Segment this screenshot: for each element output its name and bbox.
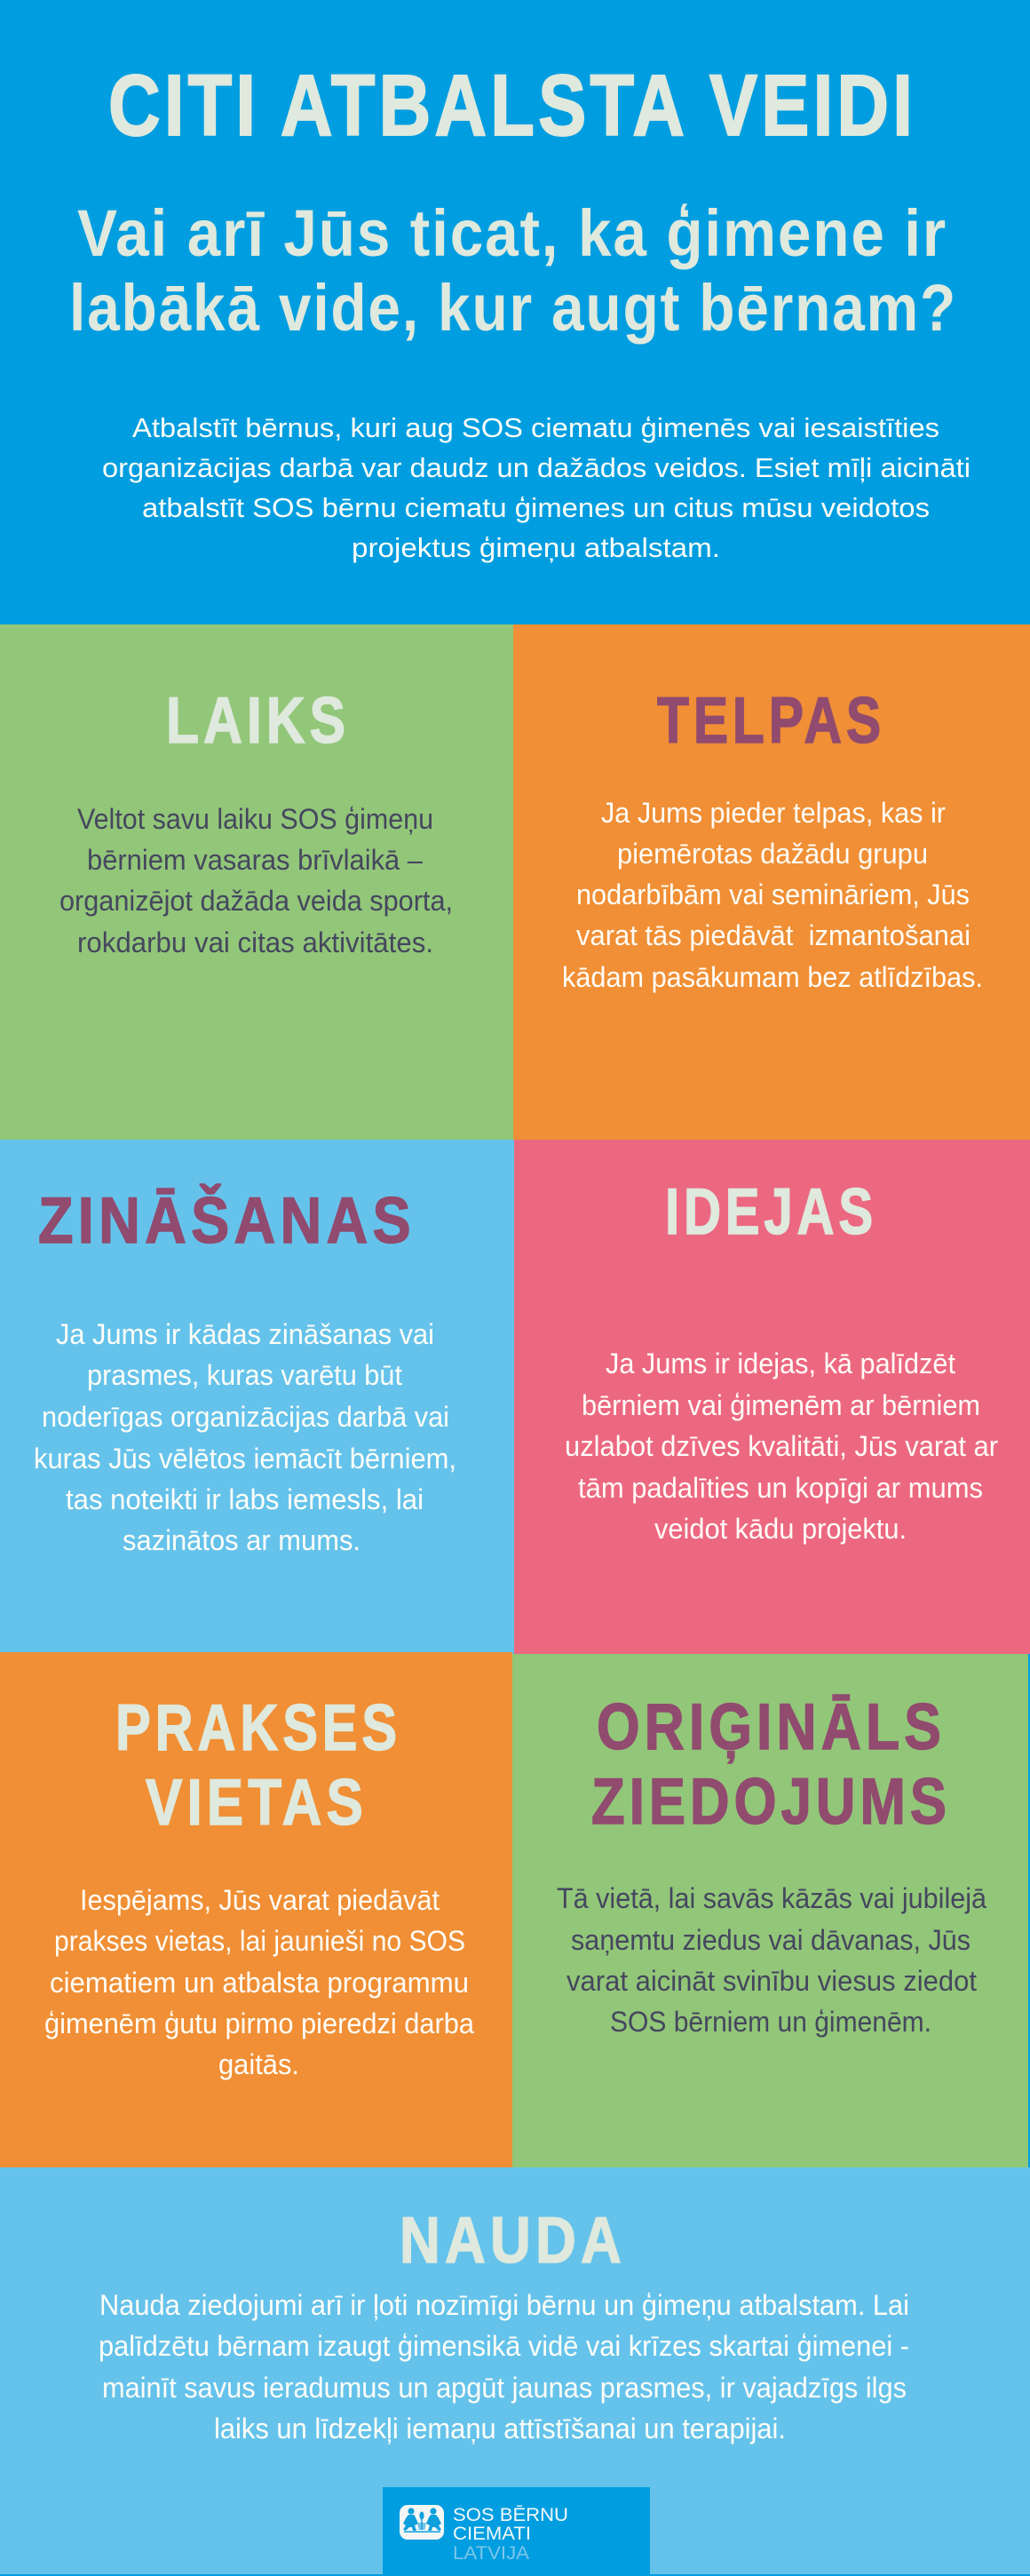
text: laiks: [59, 803, 453, 958]
text: zināšanas: sazinātos ar mums.: [123, 1524, 360, 1556]
text: zināšanas: [34, 1318, 456, 1556]
intro text: projektus ģimeņu atbalstam.: [352, 532, 720, 563]
text: prakses vietas: Iespējams, Jūs varat piedāvāt: [80, 1884, 440, 1916]
text: telpas: kādam pasākumam bez atlīdzības.: [562, 961, 983, 993]
heading: oriģināls ziedojums: ZIEDOJUMS: [591, 1766, 951, 1838]
subtitle: [69, 196, 957, 345]
panel: laiks: [0, 624, 514, 1140]
text: idejas: [565, 1348, 998, 1545]
heading: oriģināls ziedojums: [591, 1691, 951, 1838]
text: laiks: bērniem vasaras brīvlaikā –: [87, 844, 423, 876]
text: telpas: piemērotas dažādu grupu: [617, 838, 928, 870]
text: prakses vietas: ciematiem un atbalsta programmu: [50, 1967, 469, 1999]
panel: prakses vietas: [0, 1652, 512, 2167]
text: telpas: [562, 797, 983, 993]
logo text: SOS BĒRNU: [453, 2505, 568, 2525]
text: oriģināls ziedojums: saņemtu ziedus vai dāvanas, Jūs: [571, 1924, 971, 1956]
text: telpas: nodarbībām vai semināriem, Jūs: [576, 879, 970, 910]
text: nauda: palīdzētu bērnam izaugt ģimensikā vidē vai krīzes skartai ģimenei -: [99, 2330, 909, 2362]
text: nauda: [99, 2289, 909, 2445]
intro text: organizācijas darbā var daudz un dažādos veidos. Esiet mīļi aicināti: [102, 452, 971, 483]
panel: idejas: [514, 1140, 1030, 1654]
panel: zināšanas: [0, 1140, 514, 1653]
text: oriģināls ziedojums: varat aicināt svinību viesus ziedot: [566, 1965, 977, 1997]
text: oriģināls ziedojums: Tā vietā, lai savās kāzās vai jubilejā: [557, 1882, 986, 1914]
text: telpas: varat tās piedāvāt izmantošanai: [576, 919, 971, 951]
intro text: Atbalstīt bērnus, kuri aug SOS ciematu ģimenēs vai iesaistīties: [132, 412, 939, 443]
heading: prakses vietas: VIETAS: [146, 1767, 368, 1839]
heading: prakses vietas: PRAKSES: [115, 1692, 401, 1764]
logo text: [453, 2505, 568, 2564]
text: laiks: organizējot dažāda veida sporta,: [59, 885, 453, 917]
text: prakses vietas: gaitās.: [218, 2048, 299, 2080]
subtitle: Vai arī Jūs ticat, ka ģimene ir: [77, 196, 947, 270]
heading: telpas: TELPAS: [657, 685, 885, 757]
intro text: atbalstīt SOS bērnu ciematu ģimenes un citus mūsu veidotos: [142, 492, 930, 523]
text: prakses vietas: prakses vietas, lai jaunieši no SOS: [54, 1925, 465, 1957]
text: zināšanas: Ja Jums ir kādas zināšanas vai: [56, 1318, 434, 1350]
heading: zināšanas: ZINĀŠANAS: [38, 1185, 416, 1257]
text: laiks: rokdarbu vai citas aktivitātes.: [77, 926, 433, 958]
text: idejas: veidot kādu projektu.: [654, 1513, 907, 1545]
text: laiks: Veltot savu laiku SOS ģimeņu: [77, 803, 433, 835]
heading: oriģināls ziedojums: ORIĢINĀLS: [597, 1691, 946, 1763]
text: zināšanas: prasmes, kuras varētu būt: [87, 1359, 402, 1391]
heading: idejas: IDEJAS: [665, 1176, 877, 1248]
heading: nauda: NAUDA: [400, 2205, 626, 2277]
text: zināšanas: kuras Jūs vēlētos iemācīt bērniem,: [34, 1443, 456, 1475]
text: oriģināls ziedojums: [557, 1882, 986, 2038]
icon: two children and plant: [400, 2505, 444, 2540]
text: nauda: Nauda ziedojumi arī ir ļoti nozīmīgi bērnu un ģimeņu atbalstam. Lai: [99, 2289, 909, 2321]
text: zināšanas: tas noteikti ir labs iemesls, lai: [66, 1483, 424, 1515]
logo text: LATVIJA: [453, 2543, 529, 2564]
text: prakses vietas: [44, 1884, 474, 2080]
text: prakses vietas: ģimenēm ģutu pirmo pieredzi darba: [44, 2008, 474, 2039]
panel: telpas: [513, 624, 1030, 1140]
logo: sos bērnu ciemati: [383, 2487, 650, 2576]
text: idejas: uzlabot dzīves kvalitāti, Jūs varat ar: [565, 1430, 998, 1462]
text: zināšanas: noderīgas organizācijas darbā vai: [42, 1401, 449, 1433]
text: nauda: laiks un līdzekļi iemaņu attīstīšanai un terapijai.: [214, 2413, 786, 2445]
text: idejas: Ja Jums ir idejas, kā palīdzēt: [606, 1348, 955, 1379]
heading: prakses vietas: [115, 1692, 401, 1839]
intro text: [102, 412, 971, 563]
text: oriģināls ziedojums: SOS bērniem un ģimenēm.: [610, 2006, 931, 2038]
text: nauda: mainīt savus ieradumus un apgūt jaunas prasmes, ir vajadzīgs ilgs: [102, 2372, 907, 2404]
text: idejas: tām padalīties un kopīgi ar mums: [578, 1472, 983, 1504]
heading: laiks: LAIKS: [166, 685, 350, 757]
panel: nauda: [0, 2167, 1030, 2576]
text: idejas: bērniem vai ģimenēm ar bērniem: [582, 1389, 980, 1421]
logo text: CIEMATI: [453, 2524, 531, 2544]
text: telpas: Ja Jums pieder telpas, kas ir: [601, 797, 946, 829]
panel: header: [0, 0, 1030, 624]
panel: oriģināls ziedojums: [512, 1654, 1030, 2167]
